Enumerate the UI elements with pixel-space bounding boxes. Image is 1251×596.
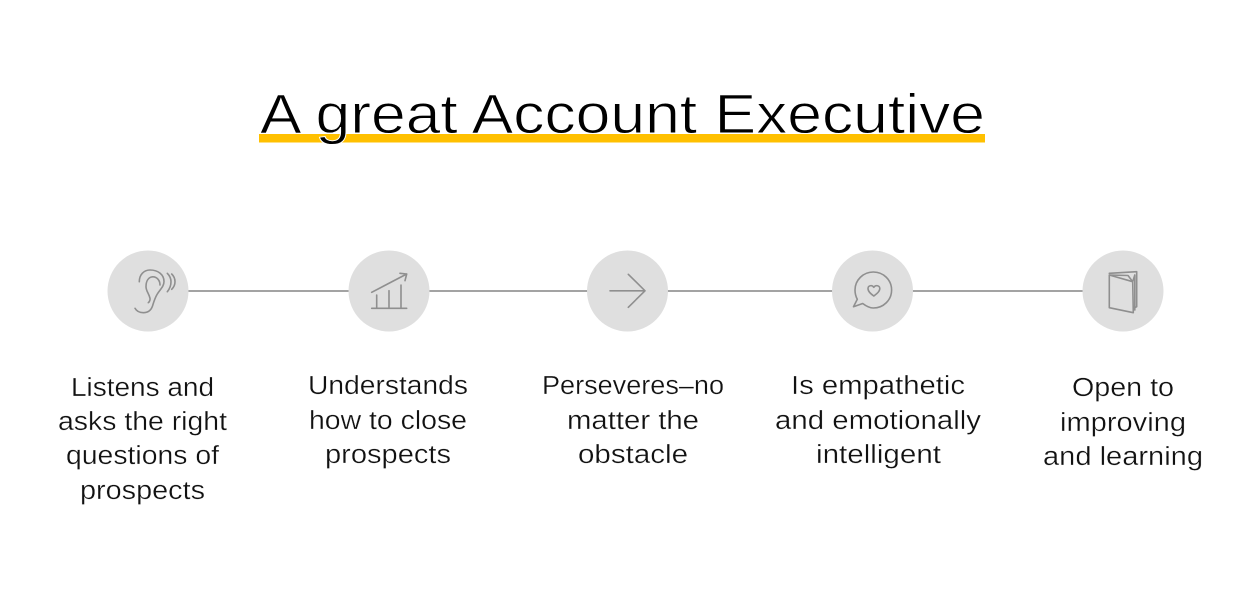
icon: ear bbox=[108, 250, 188, 332]
connector line bbox=[148, 290, 1123, 292]
label: learning bbox=[1043, 374, 1203, 471]
icon: growth chart bbox=[348, 250, 430, 332]
label: empathetic bbox=[775, 372, 981, 469]
step 2: understands bbox=[308, 250, 468, 469]
step 4: empathetic bbox=[775, 250, 981, 469]
label: learning: Open to bbox=[1072, 374, 1174, 402]
step 5: learning bbox=[1043, 250, 1203, 471]
label: understands bbox=[308, 372, 468, 469]
label: listens: Listens and bbox=[71, 374, 214, 402]
label: perseveres: Perseveres–no bbox=[542, 372, 724, 400]
label: understands: Understands bbox=[308, 372, 468, 400]
icon: open book bbox=[1082, 250, 1164, 332]
label: perseveres: matter the bbox=[567, 407, 699, 435]
label: understands: how to close bbox=[309, 407, 467, 435]
label: listens: asks the right bbox=[58, 408, 227, 436]
title: A great Account Executive bbox=[260, 82, 985, 145]
icon: arrow bbox=[587, 250, 668, 332]
step 3: perseveres bbox=[542, 250, 724, 469]
step 1: listens bbox=[58, 250, 227, 505]
label: perseveres bbox=[542, 372, 724, 469]
label: listens bbox=[58, 374, 227, 505]
label: understands: prospects bbox=[325, 441, 451, 469]
label: learning: and learning bbox=[1043, 443, 1203, 471]
label: learning: improving bbox=[1060, 409, 1186, 437]
label: empathetic: Is empathetic bbox=[791, 372, 965, 400]
icon: speech bubble with heart bbox=[832, 250, 913, 332]
label: empathetic: and emotionally bbox=[775, 407, 981, 435]
label: perseveres: obstacle bbox=[578, 441, 688, 469]
title underline bbox=[259, 134, 985, 142]
label: empathetic: intelligent bbox=[816, 441, 941, 469]
label: listens: questions of bbox=[66, 442, 220, 470]
label: listens: prospects bbox=[80, 477, 205, 505]
